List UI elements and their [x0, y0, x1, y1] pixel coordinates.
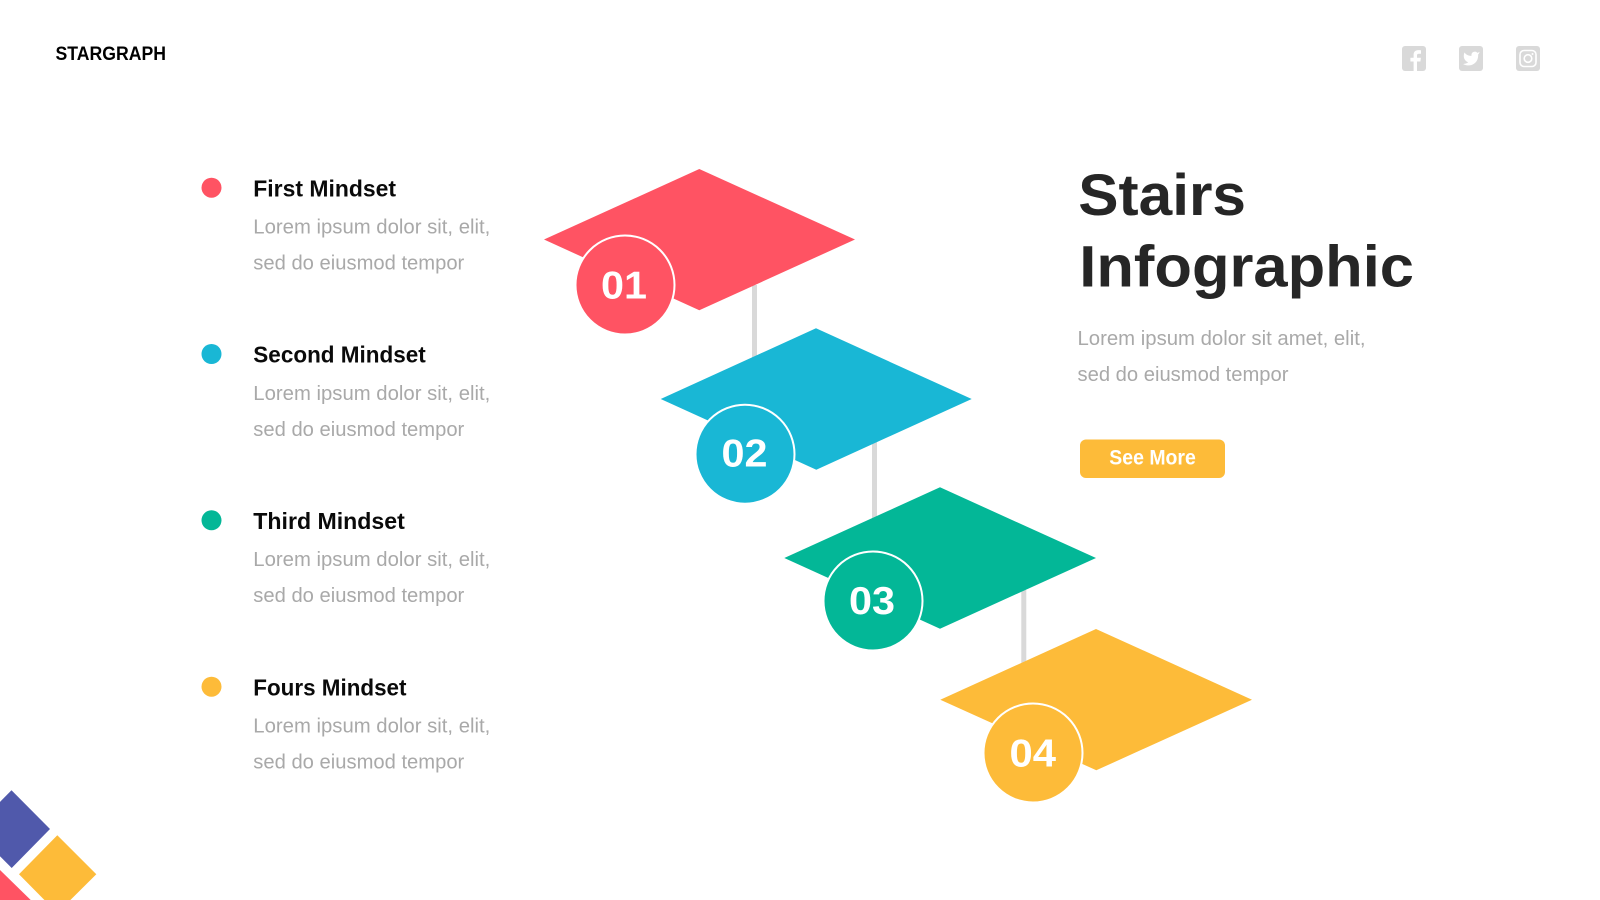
button: see more: See More — [1109, 446, 1196, 470]
stair step 01 — [544, 169, 855, 334]
bullet — [202, 510, 222, 530]
number badge — [576, 236, 674, 334]
purple square — [0, 790, 50, 868]
legend: second mindset — [202, 342, 490, 441]
connector: step 1 to 2 — [752, 285, 757, 370]
title — [1078, 163, 1414, 300]
heading: First Mindset — [253, 176, 396, 202]
icon: twitter — [1459, 46, 1483, 71]
description: Lorem ipsum dolor sit, elit, — [253, 383, 490, 405]
number: 02 — [722, 433, 768, 476]
legend: third mindset — [202, 508, 490, 607]
title: Infographic — [1079, 235, 1414, 300]
connector: step 3 to 4 — [1021, 590, 1026, 670]
stair step 02 — [661, 328, 972, 504]
number badge — [984, 704, 1082, 802]
description — [253, 383, 490, 441]
description: sed do eiusmod tempor — [253, 252, 465, 274]
yellow square — [19, 835, 96, 900]
diamond — [784, 487, 1096, 629]
description: Lorem ipsum dolor sit, elit, — [253, 216, 490, 238]
title: Stairs — [1078, 163, 1246, 228]
corner decoration — [0, 790, 96, 900]
description: Lorem ipsum dolor sit, elit, — [253, 716, 490, 738]
description — [253, 549, 490, 607]
description: sed do eiusmod tempor — [253, 585, 465, 607]
social icons — [1402, 46, 1540, 71]
description — [253, 216, 490, 274]
diamond — [661, 328, 972, 470]
heading: Fours Mindset — [253, 675, 407, 701]
description: sed do eiusmod tempor — [253, 419, 465, 441]
icon: instagram — [1516, 46, 1540, 71]
bullet — [202, 677, 222, 697]
number badge — [696, 405, 794, 504]
bullet — [202, 344, 222, 364]
number badge — [824, 552, 922, 650]
stair step 03 — [784, 487, 1096, 650]
intro text — [1078, 328, 1366, 386]
icon: facebook — [1402, 46, 1426, 71]
diamond — [940, 629, 1252, 770]
stair step 04 — [940, 629, 1252, 802]
number: 03 — [849, 580, 895, 623]
connector: step 2 to 3 — [872, 440, 877, 530]
heading: Second Mindset — [253, 342, 426, 368]
legend: fours mindset — [202, 675, 490, 774]
intro text: Lorem ipsum dolor sit amet, elit, — [1078, 328, 1366, 350]
red square — [0, 870, 31, 900]
logo: STARGRAPH: STARGRAPH — [56, 44, 166, 65]
description — [253, 716, 490, 774]
intro text: sed do eiusmod tempor — [1078, 364, 1289, 386]
description: sed do eiusmod tempor — [253, 752, 465, 774]
number: 01 — [601, 264, 647, 307]
bullet — [202, 178, 222, 198]
legend: first mindset — [202, 176, 490, 274]
heading: Third Mindset — [253, 508, 405, 534]
number: 04 — [1010, 733, 1056, 776]
button: see more — [1080, 440, 1225, 478]
description: Lorem ipsum dolor sit, elit, — [253, 549, 490, 571]
diamond — [544, 169, 855, 310]
